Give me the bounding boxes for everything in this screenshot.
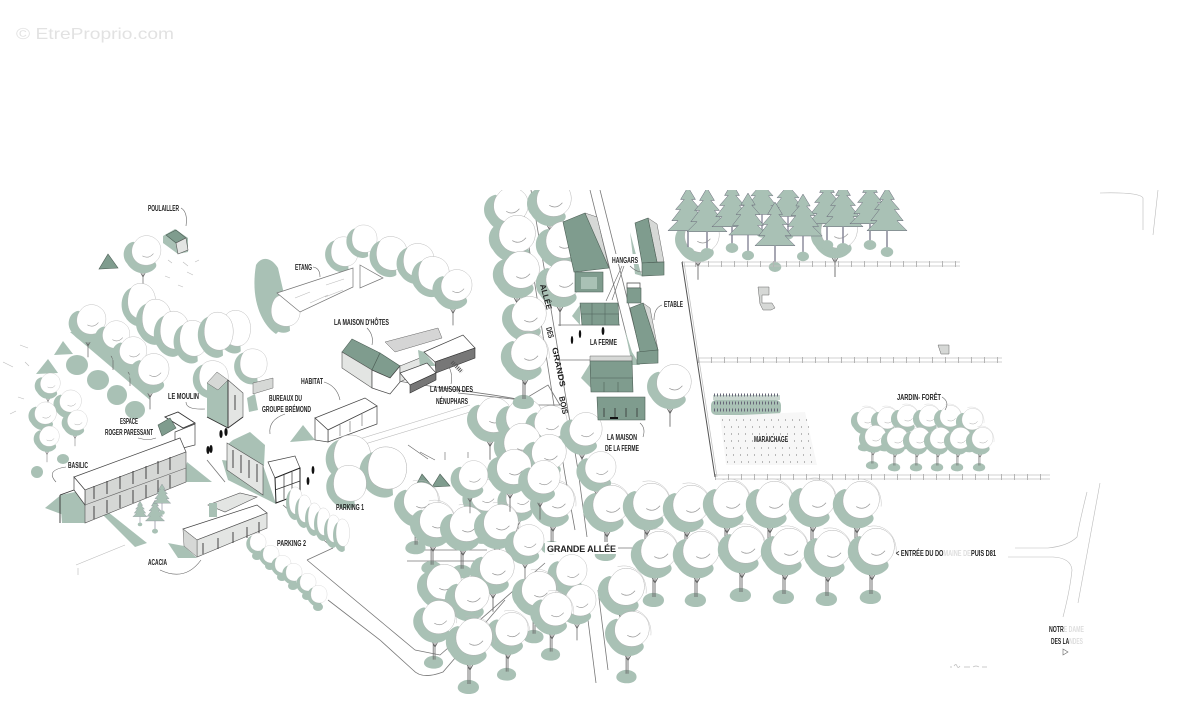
signature mark (950, 664, 987, 668)
la ferme building (581, 356, 633, 392)
label: allee des grands bois: ALLÉE (538, 283, 554, 311)
label: hangars (606, 254, 642, 301)
label: etang: ETANG (295, 263, 312, 272)
label: jardin-foret: JARDIN- FORÊT (897, 393, 941, 402)
label: etable: ETABLE (664, 300, 683, 309)
hangar left (563, 213, 609, 292)
trees: left orchard (29, 305, 169, 478)
label: la maison de la ferme: DE LA FERME (605, 444, 639, 453)
label: grande allee: GRANDE ALLÉE (547, 544, 616, 554)
roads and paths (76, 190, 890, 683)
label: allee des grands bois: GRANDS (550, 347, 567, 388)
poulailler shed (163, 229, 188, 254)
top mask (480, 0, 1200, 190)
label: parking 2: PARKING 2 (277, 539, 306, 548)
label: basilic (52, 461, 88, 482)
cows (758, 287, 949, 354)
label: espace roger paressant: ESPACE (120, 417, 138, 426)
label: la maison de la ferme: LA MAISON (607, 433, 637, 442)
label: allee des grands bois: DES (544, 326, 556, 340)
label: la maison des nenuphars (430, 367, 473, 406)
etang pond (277, 265, 383, 312)
small crates near moulin (247, 378, 273, 412)
label: espace roger paressant (105, 417, 156, 440)
label: entree du domaine: < ENTRÉE DU DOMAINE DEPUIS D81 (896, 549, 996, 558)
label: etang (295, 263, 320, 277)
hedge: curved tree row (122, 283, 251, 363)
label: notre dame des landes: DES LANDES (1051, 637, 1083, 646)
tents and chickens (3, 254, 199, 414)
label: le moulin (168, 392, 205, 409)
label: le moulin: LE MOULIN (168, 392, 199, 401)
label: la maison des nenuphars: NÉNUPHARS (436, 397, 468, 406)
label: la ferme: LA FERME (590, 338, 617, 347)
conifer forest (668, 176, 907, 280)
maraichage field (720, 412, 817, 465)
label: acacia (148, 558, 201, 574)
moulin tower (207, 372, 243, 428)
tree: poulailler (124, 236, 161, 288)
label: bureaux du groupe bremond: BUREAUX DU (269, 394, 302, 403)
maison des nenuphars (400, 335, 475, 393)
etable (625, 283, 658, 365)
trees: parking 1 row (286, 487, 350, 552)
label: habitat (301, 377, 340, 400)
label: bureaux du groupe bremond (262, 394, 311, 434)
label: habitat: HABITAT (301, 377, 323, 386)
label: la maison des nenuphars: LA MAISON DES (430, 385, 473, 394)
trees: parking 2 row (246, 533, 327, 611)
watermark: © EtreProprio.com (16, 26, 174, 43)
potager hatch (385, 328, 442, 352)
people (206, 327, 604, 485)
maison d'hotes (342, 339, 425, 394)
label: poulailler (148, 204, 186, 226)
hangar right (630, 218, 664, 276)
tree: moulin (193, 349, 267, 399)
label: basilic: BASILIC (68, 461, 88, 470)
trees: allee centre (451, 397, 616, 520)
label: la maison d'hotes (334, 318, 389, 345)
label: allee des grands bois: BOIS (557, 396, 570, 416)
trees: etang (254, 225, 449, 334)
road to Notre Dame des Landes (1008, 190, 1158, 617)
label: hangars: HANGARS (612, 256, 638, 265)
basilic building (45, 438, 212, 547)
acacia building (168, 493, 267, 558)
label: etable (654, 300, 683, 320)
top right road fragment (1005, 187, 1060, 189)
farm shed middle (572, 303, 619, 325)
label: notre dame des landes (1049, 625, 1084, 655)
maraichage greenhouse rows (711, 395, 781, 415)
label: la maison d'hotes: LA MAISON D'HÔTES (334, 318, 389, 327)
tree: right of etang (432, 270, 472, 325)
habitat (290, 398, 377, 442)
jardin-foret small trees (851, 404, 994, 471)
label: notre dame des landes: NOTRE DAME (1049, 625, 1084, 634)
label: bureaux du groupe bremond: GROUPE BRÉMOND (262, 405, 311, 414)
manor house (222, 432, 300, 504)
maison de la ferme (597, 397, 645, 420)
label: maraichage: MARAICHAGE (754, 435, 788, 444)
label: parking 1: PARKING 1 (336, 503, 364, 512)
trees: allee des grands bois (484, 181, 691, 427)
trees: central cluster (326, 435, 468, 508)
label: la maison de la ferme (605, 423, 644, 453)
trees: grande allee right rows (583, 478, 896, 683)
trees: grande allee left cluster (394, 478, 596, 694)
label: acacia: ACACIA (148, 558, 167, 567)
label: espace roger paressant: ROGER PARESSANT (105, 428, 153, 437)
label: allee des grands bois (538, 283, 570, 416)
label: jardin-foret (897, 393, 947, 410)
fences (682, 262, 1050, 479)
label: poulailler: POULAILLER (148, 204, 179, 213)
conifers small (133, 484, 171, 534)
espace roger paressant (158, 412, 195, 450)
